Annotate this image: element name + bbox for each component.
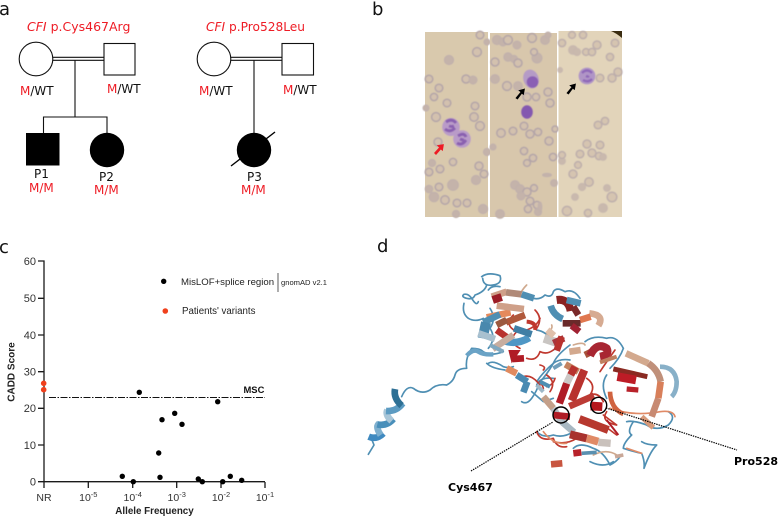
y tick labels: 0 bbox=[30, 476, 36, 488]
genotypes: P1 bbox=[34, 167, 49, 181]
smear 2 bbox=[490, 32, 558, 218]
x tick labels: -1 bbox=[268, 490, 274, 499]
x tick labels: NR bbox=[36, 492, 52, 504]
x tick labels: -4 bbox=[135, 490, 142, 499]
MSC threshold line bbox=[49, 396, 265, 398]
helix and strands bbox=[369, 292, 677, 464]
upper left domain bbox=[478, 292, 535, 392]
y tick labels: 20 bbox=[24, 403, 36, 415]
axes bbox=[38, 261, 265, 488]
genotypes: P3 bbox=[247, 170, 262, 184]
mother bbox=[19, 42, 53, 76]
Pro528 marker: Pro528 bbox=[734, 455, 778, 468]
genotypes: P2 bbox=[99, 170, 114, 184]
pedigree: CFI p.Cys467Arg bbox=[19, 19, 141, 197]
black points bbox=[120, 390, 244, 484]
neutrophils bbox=[442, 118, 471, 148]
protein ribbon model bbox=[368, 274, 677, 468]
y tick labels: 10 bbox=[24, 440, 36, 452]
patient points bbox=[41, 380, 46, 393]
x tick labels: 10 bbox=[79, 492, 91, 504]
panel b: blood smears bbox=[372, 0, 622, 218]
legend: gnomAD v2.1 bbox=[281, 278, 327, 287]
genotypes: M/WT bbox=[20, 84, 54, 98]
purple cells bbox=[521, 67, 541, 119]
x tick labels: 10 bbox=[124, 492, 135, 504]
P2 bbox=[90, 133, 124, 167]
connecting lines bbox=[44, 57, 107, 133]
main domain strands bbox=[537, 346, 677, 464]
mother bbox=[197, 42, 231, 76]
Pro528 marker bbox=[591, 397, 778, 468]
purple cell bbox=[579, 68, 595, 84]
genotypes bbox=[199, 83, 317, 197]
panel c: scatter plot bbox=[0, 237, 327, 517]
loops bbox=[368, 274, 675, 468]
x axis title: Allele Frequency bbox=[115, 506, 194, 517]
y tick labels: 40 bbox=[24, 330, 36, 342]
father bbox=[282, 44, 314, 75]
heading: CFI p.Cys467Arg bbox=[27, 19, 130, 34]
y axis title: CADD Score bbox=[6, 342, 18, 402]
genotypes: M/WT bbox=[107, 82, 141, 96]
y tick labels: 60 bbox=[24, 256, 36, 268]
upper middle domain bbox=[544, 300, 600, 351]
genotypes: M/WT bbox=[199, 84, 233, 98]
y tick labels bbox=[24, 256, 36, 488]
father bbox=[104, 44, 135, 75]
red triangle strand bbox=[508, 350, 521, 363]
genotypes: M/M bbox=[241, 183, 266, 197]
legend: MisLOF+splice region bbox=[181, 277, 274, 288]
genotypes bbox=[20, 82, 141, 197]
heading: CFI p.Pro528Leu bbox=[206, 20, 305, 34]
x tick labels: -5 bbox=[91, 490, 97, 499]
smear 1 bbox=[423, 31, 491, 218]
x tick labels: 10 bbox=[168, 492, 179, 504]
legend bbox=[161, 273, 327, 317]
pedigree: CFI p.Pro528Leu bbox=[197, 20, 317, 197]
x tick labels: -3 bbox=[179, 490, 186, 499]
black arrow bbox=[516, 89, 524, 99]
black arrow bbox=[567, 84, 576, 94]
legend: Patients' variants bbox=[182, 306, 256, 317]
MSC label: MSC bbox=[244, 384, 265, 395]
x tick labels bbox=[36, 490, 274, 504]
Cys467 marker bbox=[448, 407, 569, 494]
x tick labels: 10 bbox=[212, 492, 224, 504]
x tick labels: -2 bbox=[224, 490, 230, 499]
connecting lines bbox=[231, 57, 282, 133]
genotypes: M/M bbox=[29, 181, 54, 195]
panel d: protein structure bbox=[368, 236, 778, 494]
label d: d bbox=[377, 236, 388, 257]
y tick labels: 30 bbox=[24, 366, 36, 378]
P3 deceased bbox=[231, 132, 275, 167]
panel a: pedigrees bbox=[0, 0, 317, 197]
smear 3 bbox=[558, 31, 622, 217]
genotypes: M/M bbox=[94, 183, 119, 197]
Cys467 marker: Cys467 bbox=[448, 481, 493, 494]
N-terminal helix bbox=[369, 351, 493, 438]
y tick labels: 50 bbox=[24, 293, 36, 305]
P1 bbox=[26, 133, 60, 166]
red arrow bbox=[434, 144, 444, 154]
x tick labels: 10 bbox=[256, 492, 268, 504]
genotypes: M/WT bbox=[283, 83, 317, 97]
